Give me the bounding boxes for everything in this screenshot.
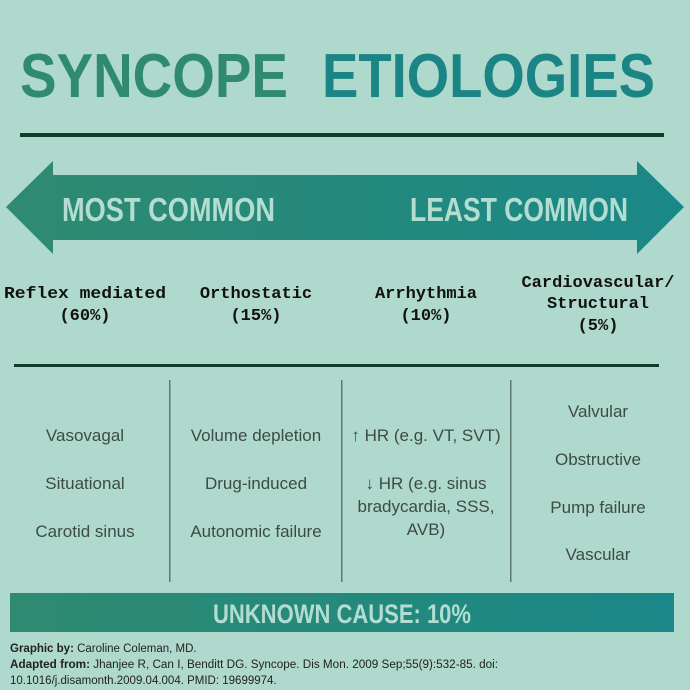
column: arrhythmia: ↑ HR (e.g. VT, SVT): [351, 426, 501, 445]
category labels: Structural: [547, 295, 649, 314]
column: reflex mediated: Carotid sinus: [35, 522, 135, 541]
category labels: Cardiovascular/: [521, 274, 675, 293]
footer credits: Adapted from: Jhanjee R, Can I, Benditt DG. Syncope. Dis Mon. 2009 Sep;55(9):532-85. doi:: [10, 659, 498, 671]
unknown cause bar: UNKNOWN CAUSE: 10%: [213, 599, 471, 629]
footer credits: [10, 643, 498, 687]
column: orthostatic: Volume depletion: [191, 426, 321, 445]
title: SYNCOPE: [20, 42, 288, 111]
arrow: most to least common: LEAST COMMON: [410, 191, 628, 228]
footer credits: 10.1016/j.disamonth.2009.04.004. PMID: 19699974.: [10, 675, 277, 687]
column: orthostatic: Autonomic failure: [190, 522, 322, 541]
column: reflex mediated: Situational: [45, 474, 125, 493]
column: reflex mediated: [35, 426, 135, 541]
column: arrhythmia: AVB): [407, 520, 445, 539]
category labels: (5%): [578, 317, 618, 336]
column: orthostatic: [190, 426, 322, 541]
title: [20, 42, 655, 111]
column: structural: Pump failure: [550, 498, 646, 517]
column: arrhythmia: ↓ HR (e.g. sinus: [366, 474, 486, 493]
column: arrhythmia: [351, 426, 501, 539]
category labels: (15%): [230, 307, 282, 326]
column: reflex mediated: Vasovagal: [46, 426, 124, 445]
category labels: Orthostatic: [200, 285, 312, 304]
category labels: Reflex mediated: [4, 285, 166, 304]
title: ETIOLOGIES: [322, 42, 655, 111]
column: structural: Obstructive: [555, 450, 641, 469]
category labels: Arrhythmia: [375, 285, 477, 304]
category labels: (10%): [400, 307, 452, 326]
unknown cause bar: [10, 593, 674, 632]
arrow: most to least common: [6, 161, 684, 254]
column: structural: Vascular: [566, 545, 631, 564]
column: orthostatic: Drug-induced: [205, 474, 307, 493]
arrow: most to least common: MOST COMMON: [62, 191, 275, 228]
category labels: (60%): [59, 307, 111, 326]
footer credits: Graphic by: Caroline Coleman, MD.: [10, 643, 197, 655]
column: arrhythmia: bradycardia, SSS,: [357, 497, 495, 516]
category labels: [4, 274, 675, 336]
column: structural: [550, 402, 646, 564]
column: structural: Valvular: [568, 402, 628, 421]
